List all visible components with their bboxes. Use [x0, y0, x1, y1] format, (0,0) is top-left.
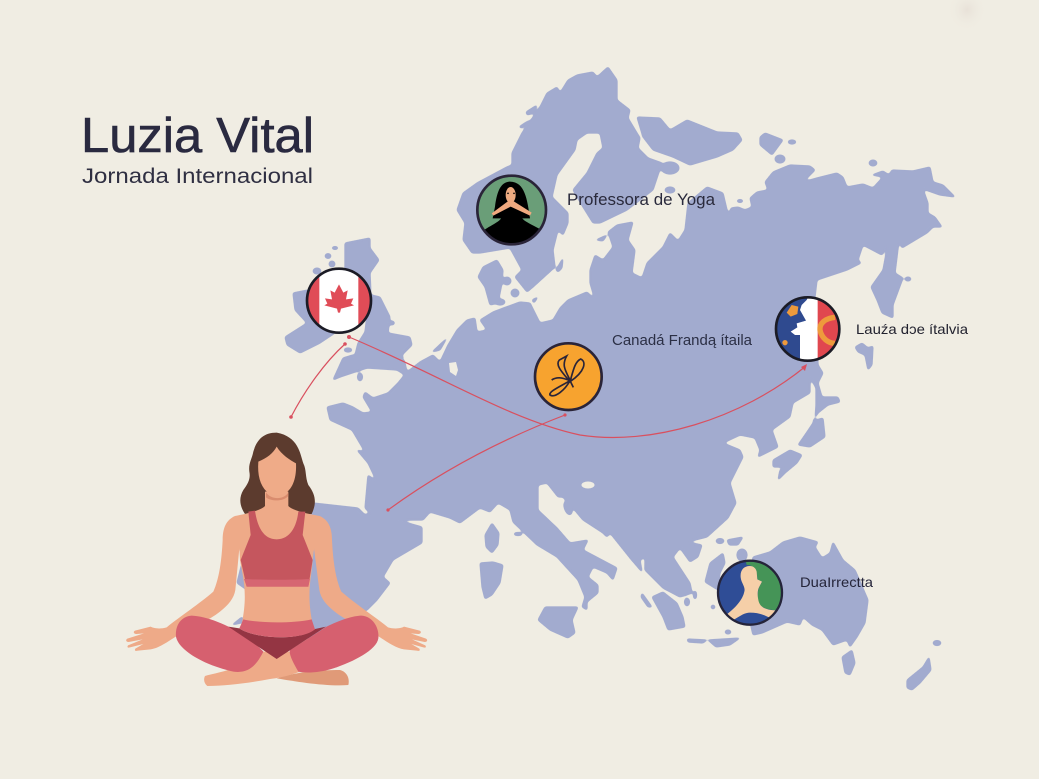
top band — [244, 579, 310, 587]
Great Britain — [333, 238, 412, 380]
connecting route lines — [289, 335, 807, 512]
inland seas — [404, 356, 594, 488]
icon: French flag map — [776, 297, 843, 362]
torso — [239, 548, 314, 624]
left arm — [126, 516, 253, 651]
islands — [232, 105, 941, 690]
subtitle: Jornada Internacional — [82, 164, 313, 188]
icon: profile portrait — [718, 557, 787, 625]
label: bottom: DuaIrrectta — [800, 574, 873, 590]
icon: yoga teacher — [477, 176, 546, 247]
hair — [240, 433, 315, 514]
route endpoints — [289, 335, 807, 512]
neck and shoulders — [235, 492, 320, 551]
label: countries: Canadá Frandą ítaila — [612, 332, 753, 349]
title: Luzia Vital — [81, 109, 314, 163]
face — [258, 447, 296, 495]
Scandinavia — [457, 67, 662, 292]
icon: Canadian flag — [305, 267, 373, 335]
route: Canada to France — [349, 337, 806, 437]
seated yoga figure — [126, 433, 427, 686]
mainland — [290, 165, 955, 640]
neck shadow — [266, 493, 288, 500]
sports top — [241, 511, 313, 587]
right leg — [290, 616, 378, 673]
Ireland — [285, 290, 335, 353]
left foot — [204, 652, 300, 686]
icon: butterfly on orange — [535, 343, 602, 410]
Australia — [745, 537, 868, 647]
right foot — [277, 670, 349, 685]
label: yoga teacher: Professora de Yoga — [567, 191, 716, 209]
route: figure to Canada — [291, 344, 345, 417]
left leg — [176, 616, 263, 672]
route: Spain to butterfly — [388, 415, 565, 510]
Kola peninsula — [637, 117, 742, 165]
right arm — [300, 516, 427, 651]
shorts shadow — [228, 627, 326, 659]
map of Eurasia and Oceania — [232, 67, 955, 690]
label: right: Lauźa dɔe ítalvia — [856, 321, 968, 337]
waistband — [239, 619, 315, 637]
